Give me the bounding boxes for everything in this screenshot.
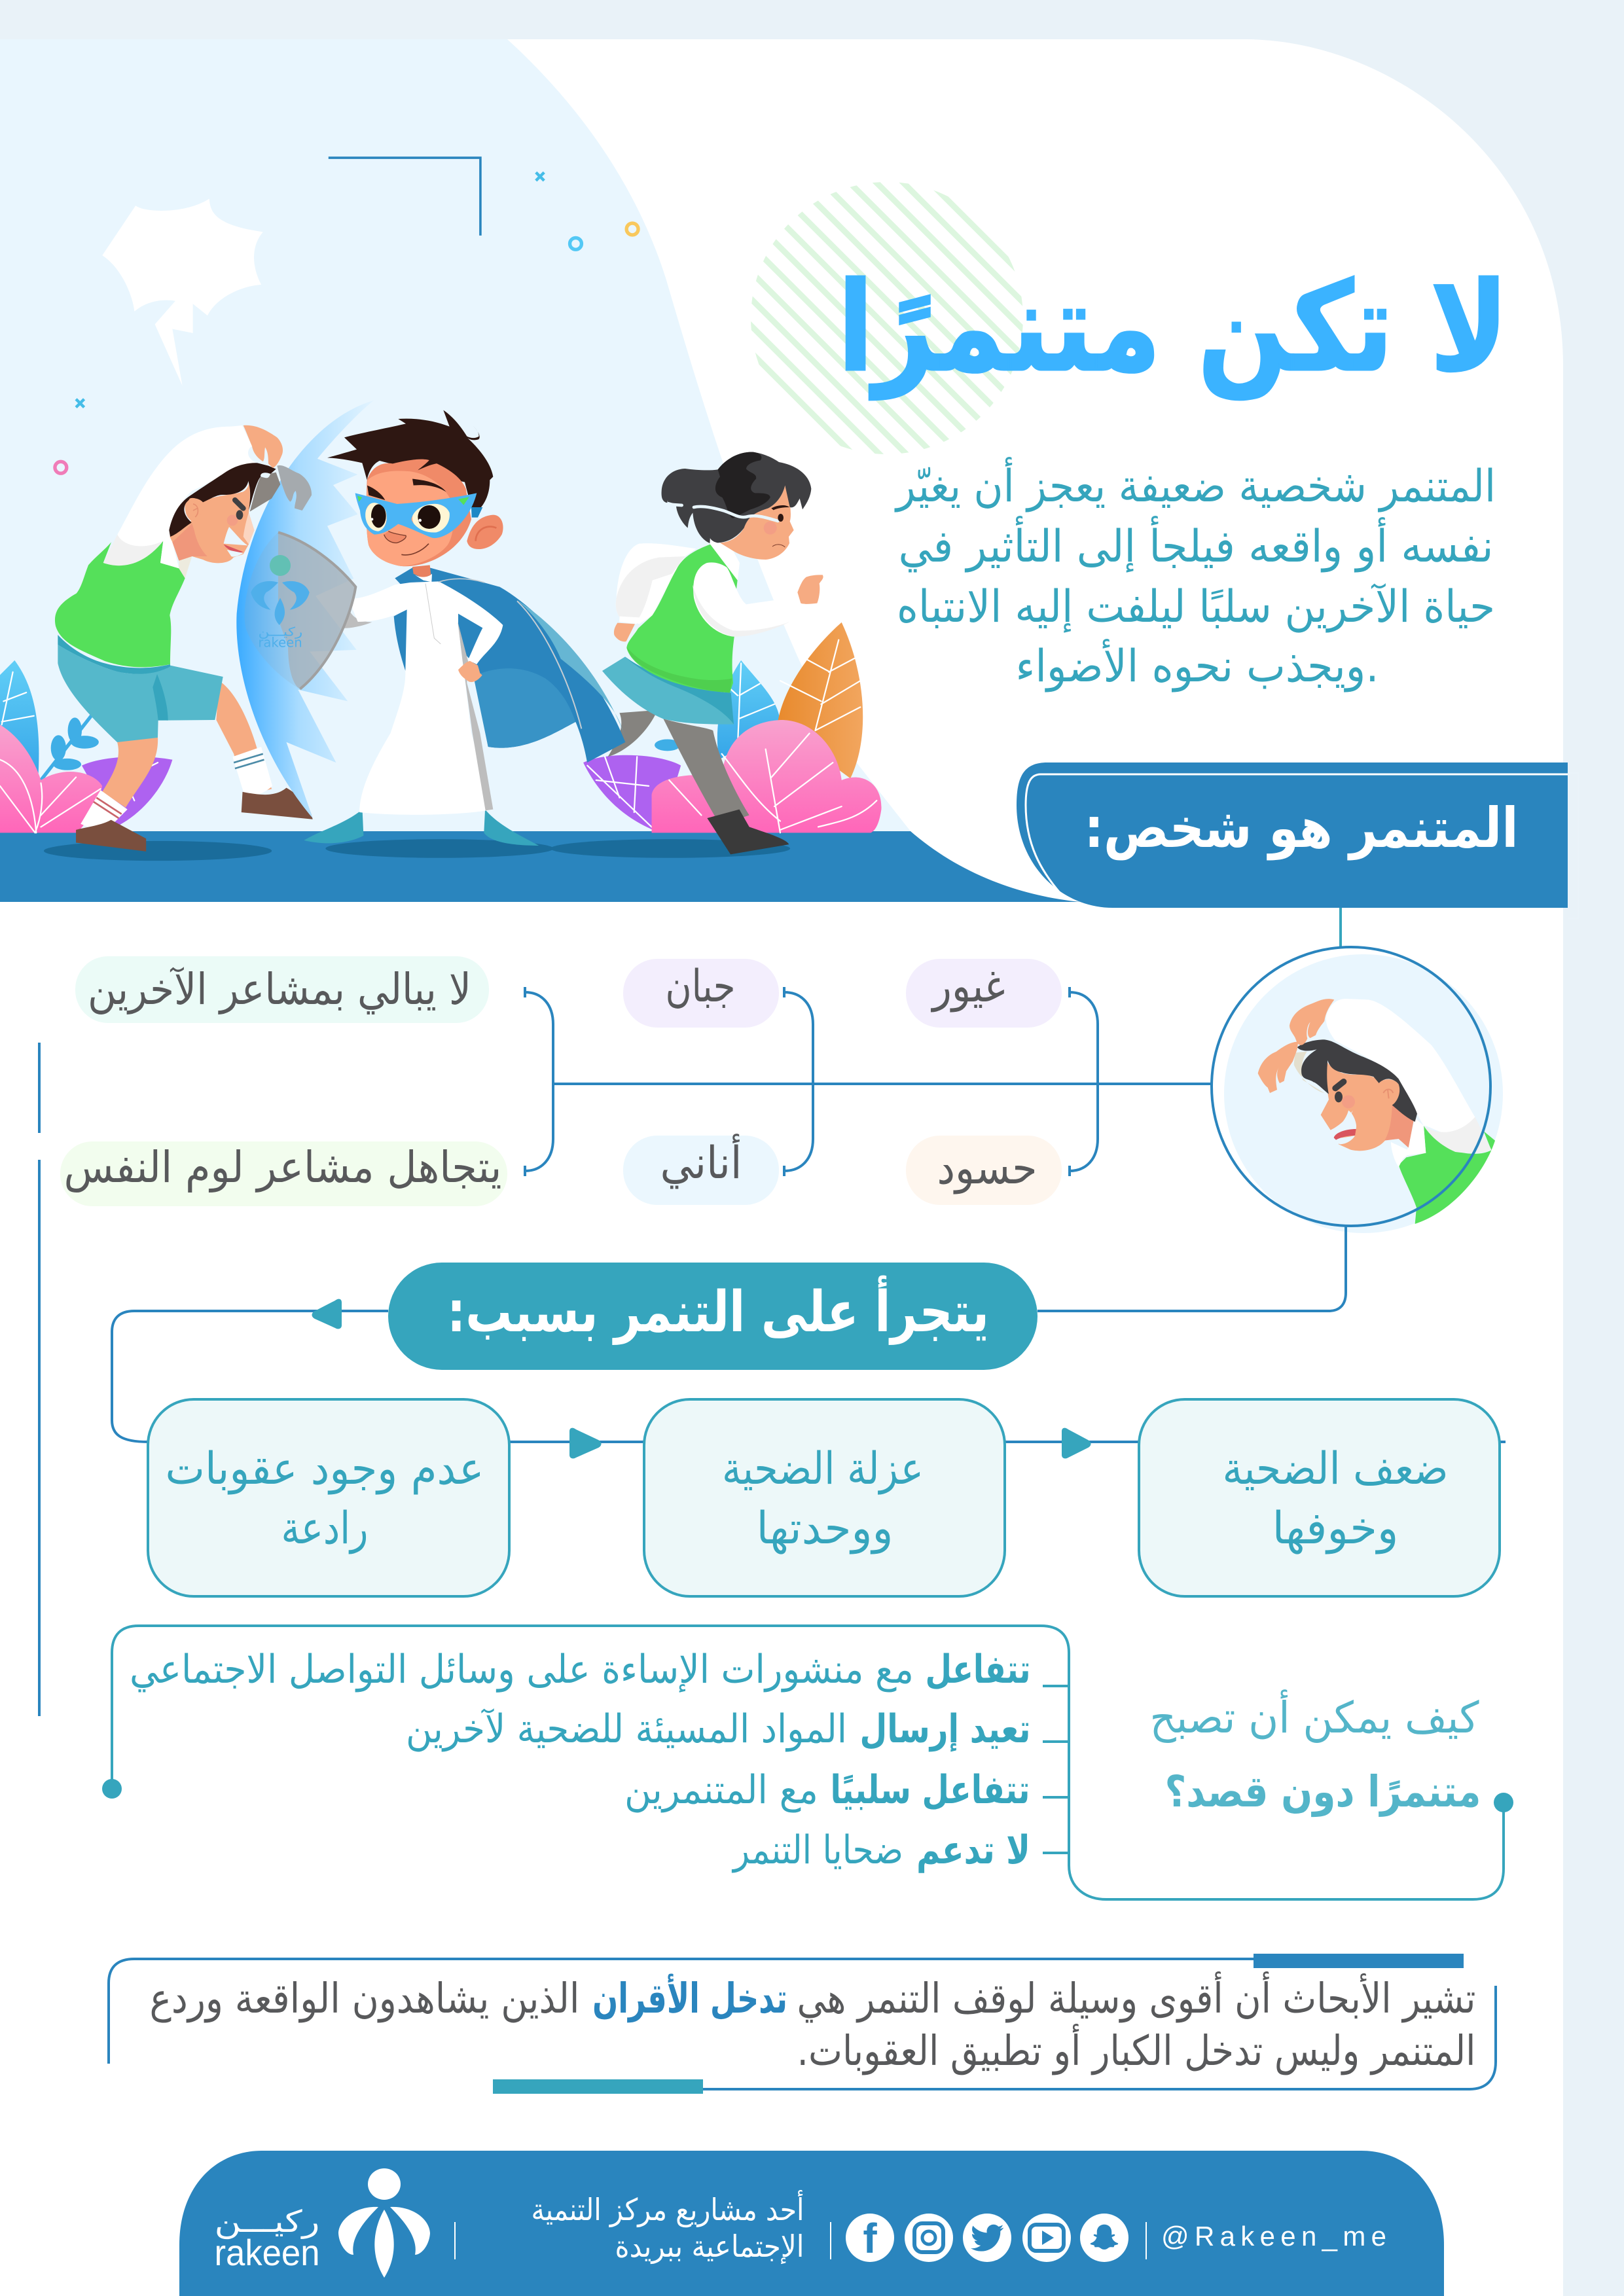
bully ear xyxy=(185,498,203,522)
research note frame xyxy=(109,1954,1496,2094)
girl vest xyxy=(626,545,738,692)
hero face xyxy=(367,459,471,566)
connector from portrait to causes heading xyxy=(1038,1227,1346,1311)
icon: instagram xyxy=(905,2214,953,2262)
rakeen logo: ركيـــن xyxy=(215,2204,319,2240)
arrow right between boxes 2 and 1 xyxy=(1062,1428,1091,1458)
hero cape xyxy=(395,567,625,762)
girl sleeve front xyxy=(693,562,797,637)
footer organisation text xyxy=(532,2190,804,2265)
girl skirt xyxy=(602,656,734,725)
connector from heading to cause boxes xyxy=(112,1311,388,1442)
girl sleeve behind xyxy=(616,543,696,624)
portrait collar xyxy=(1391,1118,1426,1167)
research note text: الذين يشاهدون الواقعة وردع xyxy=(149,1975,580,2023)
girl left fist xyxy=(614,623,635,641)
intro paragraph: حياة الآخرين سلبًا ليلفت إليه الانتباه xyxy=(897,581,1495,633)
girl headband xyxy=(663,504,778,521)
hero scene background elements xyxy=(0,158,882,861)
energy shield glow xyxy=(236,401,374,818)
cause box: isolation of the victim: ووحدتها xyxy=(757,1503,893,1554)
connectors between cause boxes xyxy=(509,1441,1506,1443)
trait pill: coward xyxy=(623,959,779,1028)
social handle: @Rakeen_me xyxy=(1161,2221,1386,2251)
icon: facebook: f xyxy=(863,2215,877,2262)
shadows on ground xyxy=(44,839,790,861)
list item 2: المواد المسيئة للضحية لآخرين xyxy=(406,1706,847,1752)
bully sleeve xyxy=(117,425,257,548)
list item 1: مع منشورات الإساءة على وسائل التواصل الاجتماعي xyxy=(130,1647,914,1693)
striped green circle xyxy=(751,182,1023,454)
cause box: isolation of the victim xyxy=(644,1399,1005,1596)
right foliage xyxy=(583,622,882,833)
portrait hands xyxy=(1290,999,1334,1045)
shield with logo: ركيـــن xyxy=(258,626,302,639)
icon: twitter xyxy=(963,2214,1011,2262)
hero neck and collar xyxy=(412,565,431,578)
hero ear xyxy=(467,515,503,549)
cause box: isolation of the victim: عزلة الضحية xyxy=(722,1443,924,1495)
footer dividers xyxy=(455,2222,1146,2259)
hero left arm xyxy=(342,610,372,628)
speech burst xyxy=(102,199,263,386)
trait pill: envious xyxy=(906,1136,1062,1205)
bully boy upper body xyxy=(55,425,312,742)
light blue hero blob xyxy=(0,39,911,831)
ground xyxy=(0,831,1080,902)
bully hair xyxy=(169,463,276,537)
research note text: المتنمر وليس تدخل الكبار أو تطبيق العقوبات. xyxy=(797,2024,1475,2075)
section banner: the bully is a person xyxy=(1017,762,1578,918)
shield with logo: rakeen xyxy=(258,635,302,651)
hero eyes xyxy=(365,502,387,532)
rakeen logo xyxy=(215,2168,430,2278)
girl collar xyxy=(710,537,740,581)
list item 2: تعيد إرسال xyxy=(860,1706,1030,1752)
how you may become a bully unintentionally xyxy=(1149,1689,1481,1818)
list item 3: مع المتنمرين xyxy=(624,1767,818,1813)
portrait circle: bully xyxy=(1212,947,1503,1233)
trait pill: selfish: أناني xyxy=(660,1134,742,1189)
trait pill: selfish xyxy=(623,1134,779,1205)
list item 1: تتفاعل xyxy=(926,1647,1030,1693)
bully mouth xyxy=(224,527,247,545)
hero thobe xyxy=(359,581,492,815)
portrait hair xyxy=(1294,1052,1324,1093)
cause box: no deterrent punishment: رادعة xyxy=(281,1503,368,1554)
rakeen logo: rakeen xyxy=(215,2232,319,2273)
portrait ear xyxy=(1379,1079,1399,1105)
research note text xyxy=(149,1971,1475,2075)
cause box: weakness of the victim xyxy=(1139,1399,1500,1596)
bully eye and brow xyxy=(236,510,243,520)
how you may become a bully unintentionally: كيف يمكن أن تصبح xyxy=(1149,1689,1479,1743)
bracket: coward and selfish xyxy=(784,987,813,1176)
list frame with dots xyxy=(102,1626,1513,1899)
list item 3 xyxy=(624,1767,1030,1813)
footer organisation text: الإجتماعية ببريدة xyxy=(615,2229,804,2265)
hero boy xyxy=(327,410,625,815)
bully shorts xyxy=(58,645,223,742)
portrait eye and brow xyxy=(1335,1092,1343,1102)
hero brows xyxy=(367,479,446,500)
bracket: jealous and envious xyxy=(1070,987,1098,1176)
running girl upper body xyxy=(602,452,823,725)
trait pill: jealous xyxy=(906,959,1062,1028)
title: لا تكن متنمرًا xyxy=(838,256,1508,400)
research note text: تشير الأبحاث أن أقوى وسيلة لوقف التنمر هي xyxy=(797,1971,1475,2023)
portrait face xyxy=(1321,1062,1414,1151)
trait pill: ignores guilt: يتجاهل مشاعر لوم النفس xyxy=(64,1142,501,1193)
bully face xyxy=(170,481,254,563)
footer bar xyxy=(179,2151,1444,2296)
portrait sleeve xyxy=(1326,999,1475,1134)
intro paragraph: المتنمر شخصية ضعيفة يعجز أن يغيّر xyxy=(894,457,1496,512)
shield with logo xyxy=(245,532,355,689)
bracket: indifferent and guilt ignoring xyxy=(525,987,553,1176)
arrow right between boxes 3 and 2 xyxy=(569,1428,601,1458)
trait pill: coward: جبان xyxy=(665,961,736,1013)
bully ghosted hand behind shield xyxy=(277,465,312,511)
icon: facebook xyxy=(846,2214,894,2262)
hero mask xyxy=(355,493,477,538)
left vertical line xyxy=(38,1043,41,1716)
list item 4: لا تدعم xyxy=(916,1827,1030,1873)
decorative corner bracket xyxy=(329,158,480,236)
bully legs and shoes xyxy=(76,681,313,852)
portrait mouth xyxy=(1333,1111,1356,1134)
list tick marks xyxy=(1043,1686,1069,1853)
girl right fist xyxy=(797,575,823,604)
portrait boy xyxy=(1258,999,1495,1224)
icon: snapchat xyxy=(1080,2214,1128,2262)
cause box: no deterrent punishment: عدم وجود عقوبات xyxy=(165,1443,484,1495)
small floating marks xyxy=(55,172,638,473)
bully vest xyxy=(55,541,185,667)
cause box: no deterrent punishment xyxy=(148,1399,509,1596)
cause box: weakness of the victim: ضعف الضحية xyxy=(1223,1443,1448,1495)
girl eye, brow and mouth xyxy=(778,514,784,522)
connector lines from portrait to traits xyxy=(554,1083,1212,1085)
cause box: weakness of the victim: وخوفها xyxy=(1272,1503,1398,1554)
list item 4 xyxy=(731,1827,1030,1873)
hero right arm xyxy=(439,581,503,664)
arrow left xyxy=(312,1299,342,1329)
hero hair xyxy=(327,410,493,507)
trait pill: jealous: غيور xyxy=(931,961,1005,1013)
hero hand on hip xyxy=(458,661,482,682)
intro paragraph xyxy=(894,457,1496,692)
footer organisation text: أحد مشاريع مركز التنمية xyxy=(532,2190,804,2228)
trait pill: ignores feelings of others: لا يبالي بمشاعر الآخرين xyxy=(88,964,471,1014)
heading: dares to bully because xyxy=(388,1263,1038,1370)
trait pill: envious: حسود xyxy=(937,1143,1037,1194)
hero feet xyxy=(304,810,539,846)
research note text: تدخل الأقران xyxy=(592,1973,787,2022)
icon: youtube xyxy=(1022,2214,1071,2262)
bully collar xyxy=(160,530,179,568)
list item 4: ضحايا التنمر xyxy=(731,1827,903,1873)
hero nose and smile xyxy=(384,531,406,543)
list item 3: تتفاعل سلبيًا xyxy=(830,1767,1030,1813)
bully hand xyxy=(244,425,283,468)
intro paragraph: نفسه أو واقعه فيلجأ إلى التأثير في xyxy=(898,516,1494,573)
how you may become a bully unintentionally: متنمرًا دون قصد؟ xyxy=(1165,1767,1481,1818)
girl legs and boot xyxy=(608,710,789,854)
left foliage xyxy=(0,660,172,833)
portrait vest xyxy=(1399,1126,1495,1224)
section banner: the bully is a person: المتنمر هو شخص: xyxy=(1084,796,1519,861)
intro paragraph: .ويجذب نحوه الأضواء xyxy=(1016,639,1379,692)
heading: dares to bully because: يتجرأ على التنمر بسبب: xyxy=(447,1275,989,1345)
girl face xyxy=(720,486,794,560)
girl hair xyxy=(662,452,811,543)
